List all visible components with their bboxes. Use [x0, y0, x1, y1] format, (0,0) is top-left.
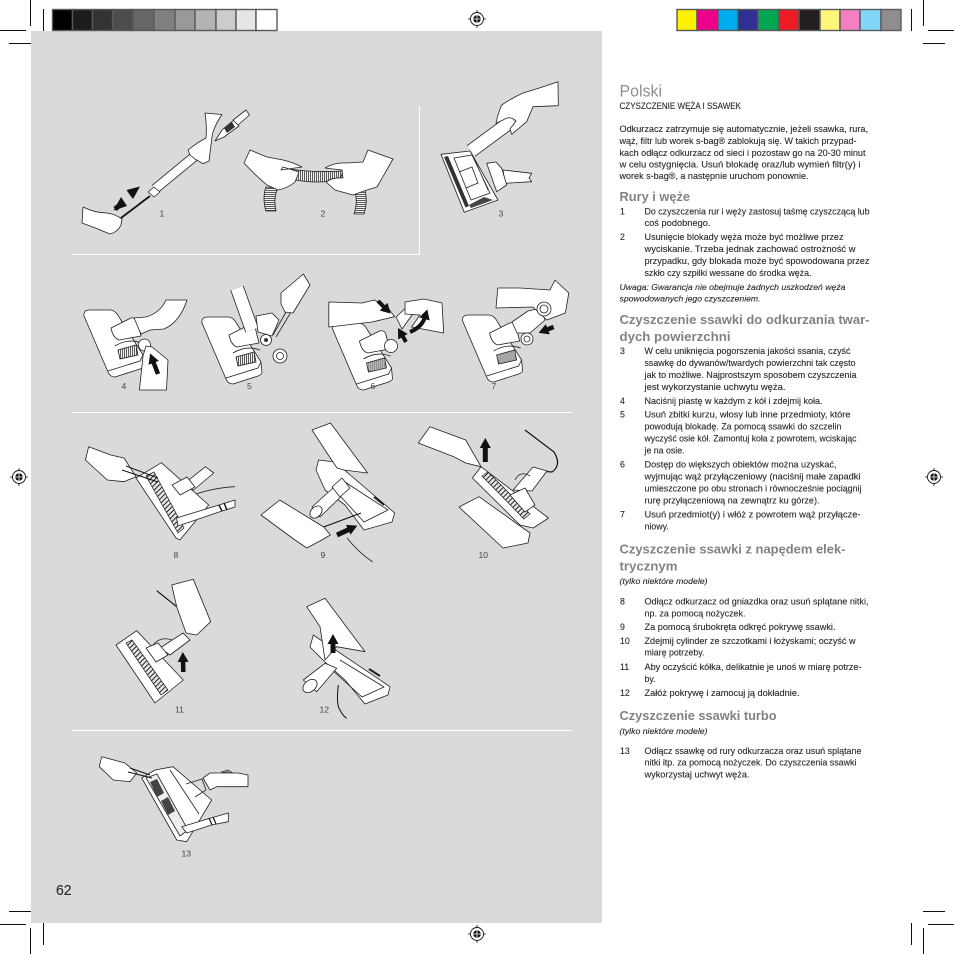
intro paragraph: w celu ostygnięcia. Usuń blokadę oraz/lub wymień filtr(y) i: [618, 160, 861, 170]
page background panel: [31, 31, 602, 923]
figure 7: reinserting the connection hose: [462, 280, 569, 382]
intro paragraph: [618, 124, 868, 181]
label 7: 7: [492, 381, 496, 391]
heading: hard floor nozzle: dych powierzchni: [620, 329, 730, 344]
list: steps 3-7: wyjmując wąż przyłączeniowy (naciśnij małe zapadki: [643, 472, 861, 482]
figure 10: removing the brush cylinder: [418, 427, 558, 548]
list: steps 8-12: [620, 596, 868, 698]
list: steps 1-2: szkło czy szpilki wessane do środka węża.: [644, 268, 812, 278]
list: steps 3-7: W celu uniknięcia pogorszenia jakości ssania, czyść: [644, 346, 851, 356]
list: steps 1-2: 2: [620, 232, 625, 242]
figure 6: removing the connection hose: [329, 299, 444, 390]
list: steps 1-2: Usunięcie blokady węża może być możliwe przez: [644, 232, 844, 242]
warranty note: Uwaga: Gwarancja nie obejmuje żadnych uszkodzeń węża: [620, 282, 846, 292]
note: some models only, turbo: (tylko niektóre modele): [620, 726, 708, 736]
double arrow: [114, 186, 140, 210]
list: steps 3-7: Usuń przedmiot(y) i włóż z powrotem wąż przyłącze-: [644, 509, 861, 519]
figure 12: replacing the cover: [300, 598, 390, 718]
list: steps 3-7: 6: [620, 460, 625, 470]
heading: hard floor nozzle: Czyszczenie ssawki do odkurzania twar-: [620, 312, 870, 327]
list: steps 3-7: 5: [620, 410, 625, 420]
list: steps 1-2: Do czyszczenia rur i węży zastosuj taśmę czyszczącą lub: [644, 206, 870, 216]
heading: hard floor nozzle: [620, 312, 870, 344]
figure 9: unscrewing the cover: [261, 423, 395, 562]
list: steps 8-12: Załóż pokrywę i zamocuj ją dokładnie.: [644, 688, 800, 698]
list: steps 1-2: wyciskanie. Trzeba jednak zachować ostrożność w: [643, 244, 856, 254]
list: steps 3-7: je na osie.: [644, 446, 685, 456]
figure 11: lifting the small wheels: [116, 579, 211, 703]
list: step 13: Odłącz ssawkę od rury odkurzacza oraz usuń splątane: [644, 746, 862, 756]
list: steps 8-12: Aby oczyścić kółka, delikatnie je unoś w miarę potrze-: [644, 662, 862, 672]
intro paragraph: worek s-bag®, a następnie uruchom ponownie.: [618, 171, 808, 181]
label 6: 6: [370, 381, 376, 391]
list: steps 3-7: 7: [620, 509, 625, 519]
list: step 13: [620, 746, 862, 780]
figure 8: cutting threads on power nozzle: [85, 447, 235, 540]
figure 4: pressing the wheel hub: [84, 300, 187, 390]
list: steps 8-12: Za pomocą śrubokręta odkręć pokrywę ssawki.: [644, 622, 836, 632]
intro paragraph: kach odłącz odkurzacz od sieci i pozostaw go na 20-30 minut: [620, 148, 866, 158]
white panel dividers: [72, 106, 572, 730]
label 2: 2: [320, 208, 326, 218]
list: steps 8-12: by.: [644, 674, 656, 684]
heading: turbo nozzle: Czyszczenie ssawki turbo: [620, 708, 777, 723]
heading: Rury i węże: Rury i węże: [620, 189, 690, 204]
grayscale colour bar: [52, 10, 277, 30]
list: steps 3-7: jak to możliwe. Najprostszym sposobem czyszczenia: [643, 370, 857, 380]
list: steps 8-12: 8: [620, 596, 625, 606]
list: steps 3-7: 4: [620, 396, 625, 406]
list: steps 1-2: 1: [620, 206, 625, 216]
list: steps 8-12: Odłącz odkurzacz od gniazdka oraz usuń splątane nitki,: [644, 596, 868, 606]
heading: power nozzle: Czyszczenie ssawki z napędem elek-: [620, 541, 846, 556]
figure 5: removing the wheel and cleaning the axle: [202, 274, 310, 384]
label 1: 1: [160, 208, 164, 218]
list: step 13: 13: [620, 746, 630, 756]
figure 1: cleaning the tube with a tape: [82, 110, 250, 234]
list: steps 8-12: 9: [620, 622, 625, 632]
label 9: 9: [320, 550, 326, 560]
label 3: 3: [498, 208, 504, 218]
list: steps 3-7: Naciśnij piastę w każdym z kół i zdejmij koła.: [644, 396, 822, 406]
label 12: 12: [320, 704, 329, 714]
note: some models only: (tylko niektóre modele): [620, 576, 708, 586]
label 5: 5: [247, 381, 252, 391]
list: steps 3-7: Dostęp do większych obiektów można uzyskać,: [644, 460, 836, 470]
list: step 13: nitki itp. za pomocą nożyczek. Do czyszczenia ssawki: [644, 758, 857, 768]
list: steps 3-7: powodują blokadę. Za pomocą ssawki do szczelin: [644, 422, 842, 432]
label 4: 4: [122, 381, 126, 391]
label 8: 8: [174, 550, 178, 560]
list: steps 3-7: rurę przyłączeniową na zewnątrz ku górze).: [644, 496, 820, 506]
warranty note: [620, 282, 846, 304]
subtitle: CZYSZCZENIE WĘŻA I SSAWEK: [620, 101, 741, 111]
label 10: 10: [478, 550, 488, 560]
warranty note: spowodowanych jego czyszczeniem.: [620, 294, 760, 304]
list: steps 3-7: 3: [620, 346, 625, 356]
process colour bar: [677, 10, 901, 30]
label 13: 13: [182, 848, 191, 858]
list: steps 8-12: 12: [620, 688, 630, 698]
heading: power nozzle: trycznym: [620, 559, 678, 574]
label 11: 11: [175, 704, 184, 714]
heading: power nozzle: [620, 541, 846, 574]
intro paragraph: Odkurzacz zatrzymuje się automatycznie, jeżeli ssawka, rura,: [620, 124, 868, 134]
list: steps 3-7: niowy.: [644, 521, 669, 531]
figure 13: cutting threads on turbo nozzle: [99, 757, 248, 842]
page number: 62: [56, 882, 72, 899]
heading: Polski: Polski: [620, 82, 662, 100]
list: steps 8-12: 10: [620, 636, 630, 646]
list: steps 1-2: coś podobnego.: [644, 218, 710, 228]
list: steps 3-7: Usuń zbitki kurzu, włosy lub inne przedmioty, które: [644, 410, 851, 420]
list: steps 8-12: Zdejmij cylinder ze szczotkami i łożyskami; oczyść w: [644, 636, 856, 646]
intro paragraph: wąż, filtr lub worek s-bag® zablokują się. W takich przypad-: [618, 136, 857, 146]
list: steps 1-2: przypadku, gdy blokada może być spowodowana przez: [644, 256, 870, 266]
figure 2: squeezing the hose: [244, 150, 393, 214]
list: steps 3-7: umieszczone po obu stronach i równocześnie pociągnij: [644, 484, 862, 494]
list: steps 8-12: np. za pomocą nożyczek.: [644, 608, 746, 618]
list: steps 3-7: jest wykorzystanie uchwytu węża.: [643, 382, 786, 392]
list: steps 1-2: [620, 206, 870, 278]
list: steps 3-7: ssawkę do dywanów/twardych powierzchni tak często: [644, 358, 856, 368]
list: steps 3-7: wyczyść osie kół. Zamontuj koła z powrotem, wciskając: [644, 434, 857, 444]
figure 3: hand holding upturned nozzle: [441, 82, 558, 212]
list: steps 8-12: miarę potrzeby.: [644, 648, 704, 658]
list: steps 8-12: 11: [620, 662, 629, 672]
list: step 13: wykorzystaj uchwyt węża.: [643, 770, 750, 780]
list: steps 3-7: [620, 346, 862, 531]
